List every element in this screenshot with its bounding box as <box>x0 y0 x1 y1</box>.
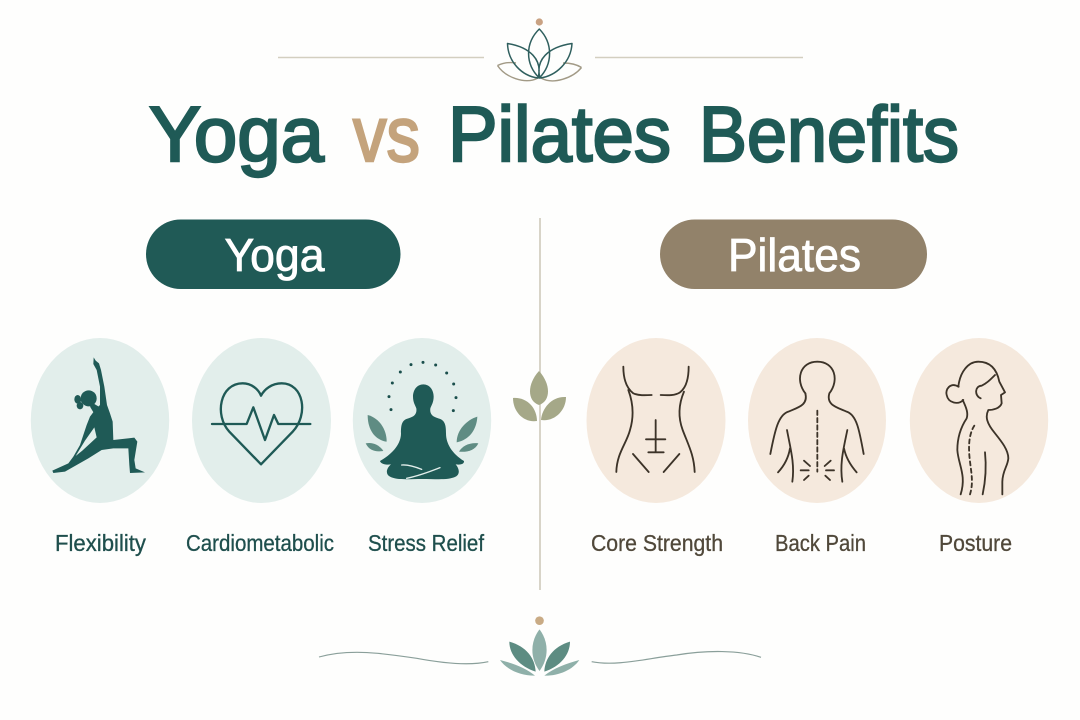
icon: side profile with spine <box>946 362 1008 494</box>
title: Benefits <box>699 90 959 178</box>
panel: core strength <box>586 338 726 556</box>
panel: cardiometabolic <box>186 338 334 556</box>
title: Yoga <box>149 90 325 178</box>
label: back pain: Back Pain <box>775 530 866 556</box>
pilates pill <box>660 220 927 289</box>
label: core strength: Core Strength <box>591 530 723 556</box>
title: Pilates <box>448 90 671 178</box>
yoga pill: Yoga <box>224 229 325 281</box>
yoga pill <box>146 220 400 289</box>
label: cardiometabolic: Cardiometabolic <box>186 530 334 556</box>
pilates pill: Pilates <box>728 229 861 281</box>
bottom lotus ornament <box>319 616 761 676</box>
label: posture: Posture <box>939 530 1012 556</box>
panel: back pain <box>748 338 886 556</box>
icon: back with spine <box>770 362 864 482</box>
icon: yoga lunge figure <box>52 357 145 473</box>
top lotus ornament <box>278 18 803 81</box>
icon: heart with pulse <box>212 383 310 464</box>
label: stress relief: Stress Relief <box>368 530 485 556</box>
icon: meditating figure <box>366 361 478 479</box>
panel: flexibility <box>31 338 169 556</box>
label: flexibility: Flexibility <box>55 530 146 556</box>
panel: stress relief <box>353 338 491 556</box>
icon: torso with abs <box>616 367 695 472</box>
central divider with leaf <box>513 218 566 590</box>
title <box>149 90 959 178</box>
panel: posture <box>910 338 1048 556</box>
title: vs <box>353 90 420 178</box>
